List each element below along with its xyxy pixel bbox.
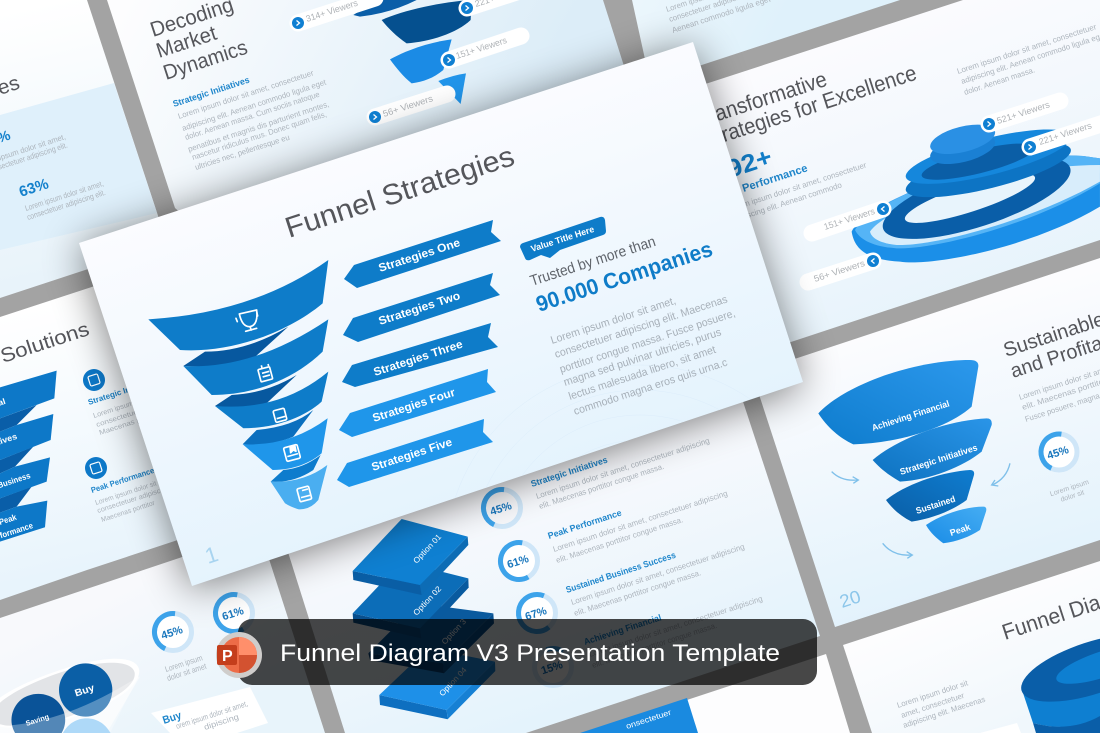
text block: description: porttitor congue massa. Fusce posuere, (558, 308, 737, 376)
donut: 45 percent (1035, 428, 1083, 476)
banner: strategies two (343, 273, 500, 342)
label: 521 viewers (983, 99, 1060, 130)
funnel labels: Peak (949, 522, 973, 538)
label: 56 viewers (369, 93, 447, 123)
text block (896, 678, 986, 730)
segment 1 (148, 260, 328, 350)
arrow: left lower (883, 543, 912, 558)
text block: peak performance: adipiscing elit. Aenean commodo (730, 180, 843, 225)
panel: slide top left: 63% (17, 175, 51, 201)
text block: adipiscing elit. Maecenas (902, 695, 986, 730)
card: buy (151, 687, 268, 733)
text block: strategic initiatives: Strategic Initiatives (172, 75, 251, 109)
card: buy: dipiscing (203, 712, 240, 732)
text block: strategic initiatives (172, 68, 330, 172)
text block: sustained business success: Lorem ipsum dolor sit amet, consectetuer adipiscing (570, 542, 746, 607)
chart: stacked ring funnel (852, 118, 1100, 262)
card: buy: orem ipsum dolor sit amet, (175, 699, 249, 731)
text block: description: magna sed pulvinar ultricies, purus (562, 326, 723, 389)
heading: transformative strategies: Transformative (694, 66, 830, 132)
text block: right description: Lorem ipsum dolor sit amet, consectetuer (956, 22, 1098, 76)
text block: description: lectus malesuada libero, sit amet (567, 344, 717, 403)
chart: funnel with circles (0, 659, 140, 733)
icon: trophy (236, 310, 258, 331)
chart: funnel with circles: Buy (74, 683, 96, 700)
text block: donut caption: dolor sit (1060, 489, 1085, 504)
banner: strategies two: Strategies Two (377, 290, 462, 328)
segment 3 (215, 372, 328, 428)
funnel labels (871, 398, 979, 538)
card: buy: Buy (161, 709, 184, 727)
text block: strategic initiatives: dolor. Aenean massa. Cum sociis natoque (184, 90, 321, 142)
text block: peak performance (90, 466, 162, 524)
panel: slide sustainable and profitable (752, 258, 1100, 627)
panel: slide top left: Lorem ipsum dolor sit amet, (24, 179, 105, 213)
title: Funnel Strategies (281, 140, 518, 245)
text block: donut caption: Lorem ipsum (164, 653, 204, 674)
text block: peak performance: Lorem ipsum dolor sit amet, consectetuer (727, 160, 868, 214)
text block: achieving financial: Lorem ipsum dolor sit amet, consectetuer adipiscing (588, 594, 764, 659)
donut: 15 percent: 15% (540, 659, 565, 677)
text block: peak performance: elit. Maecenas porttitor congue massa. (555, 515, 684, 565)
segment 2 (183, 319, 328, 395)
banner: strategies one (344, 220, 501, 288)
text block: achieving financial: elit. Maecenas porttitor congue massa. (591, 621, 718, 670)
icon: powerpoint (216, 632, 262, 678)
label: 56 viewers: 56+ Viewers (382, 93, 435, 119)
label: 151 viewers right (812, 203, 889, 233)
heading: decoding market dynamics: Dynamics (160, 36, 250, 85)
arrow: left upper (832, 472, 858, 483)
panel: slide bottom centre: onsectetuer (625, 708, 673, 731)
banner: strategies five (337, 419, 493, 487)
donut: 67 percent: 67% (524, 605, 549, 623)
arrow: right (992, 463, 1010, 486)
text block: peak performance: Peak Performance (90, 466, 156, 495)
text block: peak performance: Lorem ipsum dolor sit (94, 480, 158, 507)
donut: 61 percent: 61% (221, 605, 246, 623)
text block: description: Lorem ipsum dolor sit amet, (549, 295, 678, 347)
panel: slide top left (0, 0, 167, 298)
text block: peak performance: Peak Performance (547, 508, 623, 541)
text block: description (549, 293, 737, 418)
text block: strategic initiatives: Lorem ipsum dolor sit amet, consectetuer (177, 68, 315, 121)
segment 5 (271, 465, 327, 509)
text block: description: consectetuer adipiscing elit. Maecenas (553, 293, 730, 361)
label: 221 viewers right: 221+ Viewers (1038, 120, 1093, 147)
donut: 45 percent (148, 607, 198, 657)
text block: description: commodo magna eros quis urna.c (572, 357, 730, 418)
chart: funnel with circles: Saving (25, 712, 50, 728)
text block: strategic initiatives: consectetuer (95, 408, 142, 429)
chart: stacked option blocks: Option 3 (440, 617, 468, 646)
donut: 45 percent: 45% (1046, 444, 1071, 462)
label: 151 viewers: 151+ Viewers (455, 35, 508, 61)
text block: strategic initiatives: Lorem ipsum dolor sit amet, consectetuer adipiscing (535, 436, 711, 501)
icon: bookmark book (283, 444, 301, 462)
text block: strategic initiatives: ultricies nec, pellentesque eu (194, 133, 291, 172)
label: 221 viewers right (1024, 120, 1100, 153)
text block: peak performance: Lorem ipsum dolor sit amet, consectetuer adipiscing (552, 489, 729, 554)
text block: peak performance (713, 143, 868, 225)
label: 314 viewers (292, 0, 375, 29)
panel: slide bottom centre (580, 654, 850, 733)
chart: funnel segments (353, 0, 472, 104)
chart: 3D funnel (818, 360, 1010, 558)
icon: book badge (83, 369, 105, 391)
text block: sustained business success: elit. Maecenas porttitor congue massa. (573, 568, 702, 618)
heading: Solutions (0, 318, 92, 368)
badge: value title here (520, 217, 606, 260)
text block: strategic initiatives: Lorem ipsum (92, 400, 135, 420)
text block: strategic initiatives: Maecenas po (98, 415, 146, 437)
text block: achieving financial: Achieving Financial (583, 612, 663, 647)
text block: amet, consectetuer (900, 691, 966, 720)
panel: slide buy and saving (0, 531, 325, 733)
text block: right description: dolor. Aenean massa. (963, 65, 1036, 97)
panel: slide top centre (632, 0, 900, 82)
text block: strategic initiatives: adipiscing elit. Aenean commodo ligula eget (181, 77, 328, 133)
icon: clipboard (258, 364, 273, 382)
text block: strategic initiatives (87, 375, 161, 437)
text block: peak performance: consectetuer adipisc (96, 488, 162, 515)
panel: slide transformative strategies (690, 0, 1100, 352)
title text: Funnel Diagram V3 Presentation Template (280, 640, 780, 667)
text block: strategic initiatives: Strategic Initiatives (87, 375, 161, 407)
icon: powerpoint: P (222, 648, 233, 665)
banner: strategies five: Strategies Five (370, 436, 454, 474)
chart: five level funnel (148, 260, 328, 509)
page number: 1 (202, 541, 221, 569)
text block: strategic initiatives: nascetur ridiculus mus. Donec quam felis, (191, 110, 328, 162)
label: 56 viewers right: 56+ Viewers (813, 258, 867, 284)
text block: strategic initiatives: penatibus et magnis dis parturient montes, (187, 100, 330, 154)
page number: 20 (837, 586, 863, 612)
banner: strategies three (342, 323, 498, 387)
badge: value title here: Value Title Here (530, 224, 595, 254)
main slide shadow (79, 46, 803, 590)
donut: 15 percent (529, 643, 577, 691)
text block: peak performance: Peak Performance (713, 162, 809, 204)
callout: trusted by companies: Trusted by more than (528, 233, 658, 290)
banner: strategies four: Strategies Four (371, 387, 457, 425)
chart: stacked option blocks: Option 04 (438, 665, 469, 698)
label: 151 viewers right: 151+ Viewers (823, 206, 876, 232)
chart: layered funnel (0, 371, 57, 542)
label: 521 viewers: 521+ Viewers (996, 99, 1051, 126)
icon: bookmark badge (85, 457, 107, 479)
text block: description: elit. Maecenas porttitor (1021, 376, 1100, 412)
chart: cylinder funnel (1014, 620, 1100, 733)
text block: peak performance: Maecenas porttitor (100, 500, 156, 524)
funnel labels: Sustained (915, 494, 957, 516)
title bar (216, 619, 817, 685)
donut: 45 percent (477, 483, 527, 533)
heading: transformative strategies: Strategies for Excellence (700, 60, 920, 153)
banner: strategies one: Strategies One (377, 237, 462, 275)
panel: main slide funnel strategies (79, 42, 803, 586)
text block: strategic initiatives: elit. Maecenas porttitor congue massa. (538, 462, 665, 511)
chart: stacked option blocks: Option 01 (412, 532, 444, 565)
label: 151 viewers (443, 35, 521, 66)
callout: trusted by companies: 90.000 Companies (533, 236, 716, 317)
funnel labels: Strategic Initiatives (899, 442, 979, 477)
icon: tablet (273, 408, 287, 423)
segment 4 (243, 418, 328, 470)
text block: strategic initiatives: Strategic Initiatives (530, 455, 609, 489)
text block: donut caption (164, 653, 208, 683)
label: 221 viewers (461, 0, 560, 14)
heading: decoding market dynamics (147, 0, 250, 85)
panel: slide top left: consectetuer adipiscing elit. (26, 188, 107, 222)
donut: 45 percent: 45% (160, 624, 185, 642)
icon: book (297, 486, 312, 502)
panel: slide decoding market dynamics (107, 0, 630, 230)
donut: 61 percent (209, 588, 259, 638)
text block: donut caption: dolor sit amet (166, 661, 208, 683)
text block: peak performance: 92+ (723, 143, 776, 184)
chart: stacked option blocks (353, 519, 495, 719)
donut: 61 percent: 61% (506, 553, 531, 571)
panel: slide funnel diagram (843, 561, 1100, 733)
banner: strategies four (339, 369, 496, 437)
text block: donut caption: Lorem ipsum (1049, 479, 1090, 498)
text block: sustained business success: Sustained Business Success (565, 550, 677, 595)
label: 56 viewers right (808, 255, 879, 284)
chart: stacked option blocks: Option 02 (412, 584, 444, 617)
text block: Lorem ipsum dolor sit (896, 678, 970, 710)
funnel labels: Achieving Financial (871, 398, 951, 433)
banner: strategies three: Strategies Three (372, 339, 464, 379)
donut: 45 percent: 45% (489, 500, 514, 518)
heading: decoding market dynamics: Market (153, 22, 220, 63)
card (980, 723, 1021, 733)
donut: 61 percent (494, 536, 544, 586)
panel: slide solutions (0, 245, 320, 600)
donut: 67 percent (511, 587, 563, 639)
panel: slide options and percentages (270, 362, 820, 733)
